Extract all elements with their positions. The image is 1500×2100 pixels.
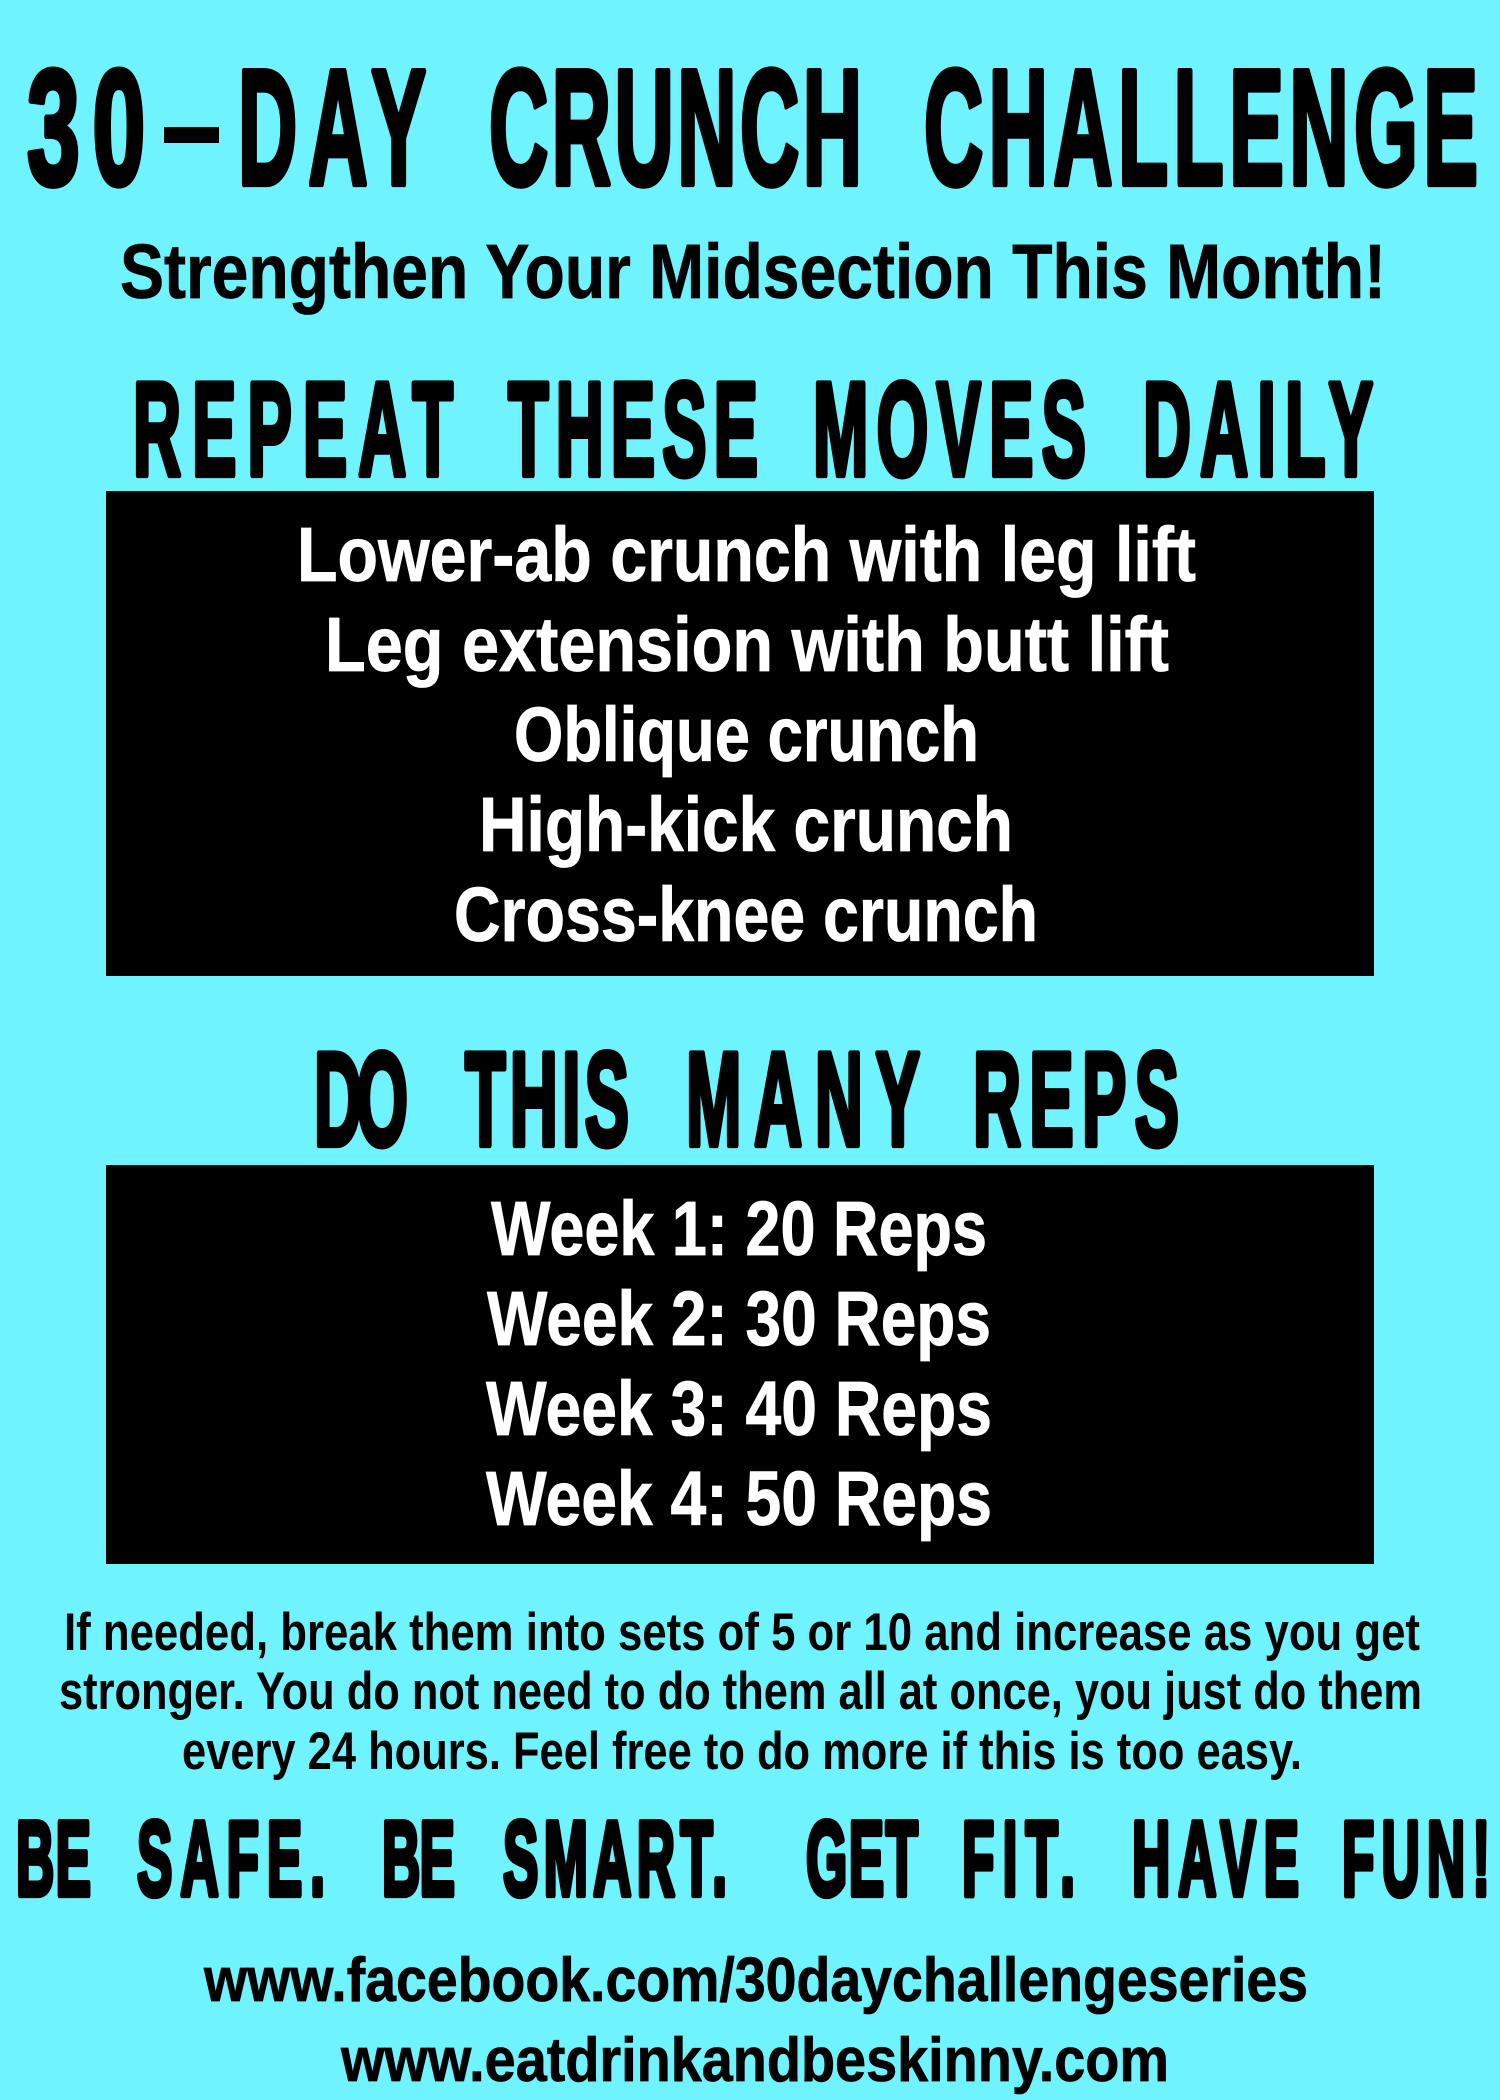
- heading: do this many reps: MANY: [686, 1026, 920, 1174]
- facebook url: www.facebook.com/30daychallengeseries: [203, 1946, 1308, 2015]
- title: 30: [27, 37, 145, 219]
- heading: do this many reps: THIS: [465, 1026, 629, 1174]
- heading: repeat these moves daily: MOVES: [813, 356, 1086, 504]
- slogan: HAVE: [1132, 1799, 1299, 1918]
- move 1: Lower-ab crunch with leg lift: [297, 512, 1196, 598]
- website url: www.eatdrinkandbeskinny.com: [340, 2026, 1169, 2095]
- slogan: FIT.: [962, 1799, 1075, 1918]
- title: DAY: [238, 37, 426, 219]
- title: CHALLENGE: [924, 37, 1478, 219]
- title: CRUNCH: [489, 37, 862, 219]
- heading: do this many reps: DO: [314, 1026, 408, 1174]
- week 1: Week 1: 20 Reps: [491, 1186, 987, 1272]
- panel: moves list: [106, 491, 1374, 976]
- panel: reps per week: [106, 1165, 1374, 1564]
- move 3: Oblique crunch: [514, 692, 979, 778]
- slogan: BE: [16, 1799, 91, 1918]
- heading: do this many reps: REPS: [973, 1026, 1179, 1174]
- slogan: [16, 1799, 1490, 1918]
- slogan: BE: [382, 1799, 455, 1918]
- instructions paragraph: [59, 1603, 1422, 1781]
- week 3: Week 3: 40 Reps: [486, 1366, 992, 1452]
- move 5: Cross-knee crunch: [454, 872, 1038, 958]
- heading: repeat these moves daily: [133, 356, 1373, 504]
- slogan: GET: [806, 1799, 918, 1918]
- heading: repeat these moves daily: THESE: [508, 356, 758, 504]
- title: [27, 37, 1478, 219]
- move 4: High-kick crunch: [479, 782, 1013, 868]
- move 2: Leg extension with butt lift: [325, 602, 1169, 688]
- slogan: SAFE.: [137, 1799, 325, 1918]
- heading: repeat these moves daily: DAILY: [1143, 356, 1373, 504]
- week 2: Week 2: 30 Reps: [487, 1276, 991, 1362]
- heading: repeat these moves daily: REPEAT: [133, 356, 453, 504]
- heading: do this many reps: [314, 1026, 1179, 1174]
- week 4: Week 4: 50 Reps: [486, 1456, 992, 1542]
- slogan: FUN!: [1342, 1799, 1490, 1918]
- slogan: SMART.: [503, 1799, 727, 1918]
